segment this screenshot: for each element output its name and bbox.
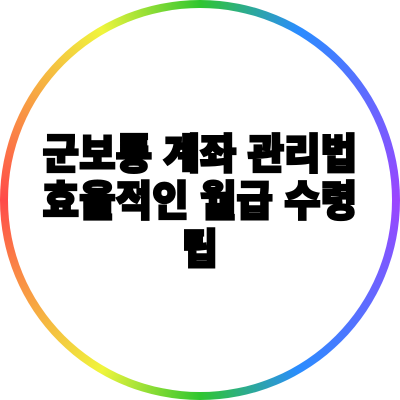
title: [42, 132, 357, 273]
title line 2: 효율적인 월급 수령: [43, 179, 357, 225]
title line 1: 군보통 계좌 관리법: [43, 132, 357, 178]
title line 3: 팁: [182, 227, 218, 273]
